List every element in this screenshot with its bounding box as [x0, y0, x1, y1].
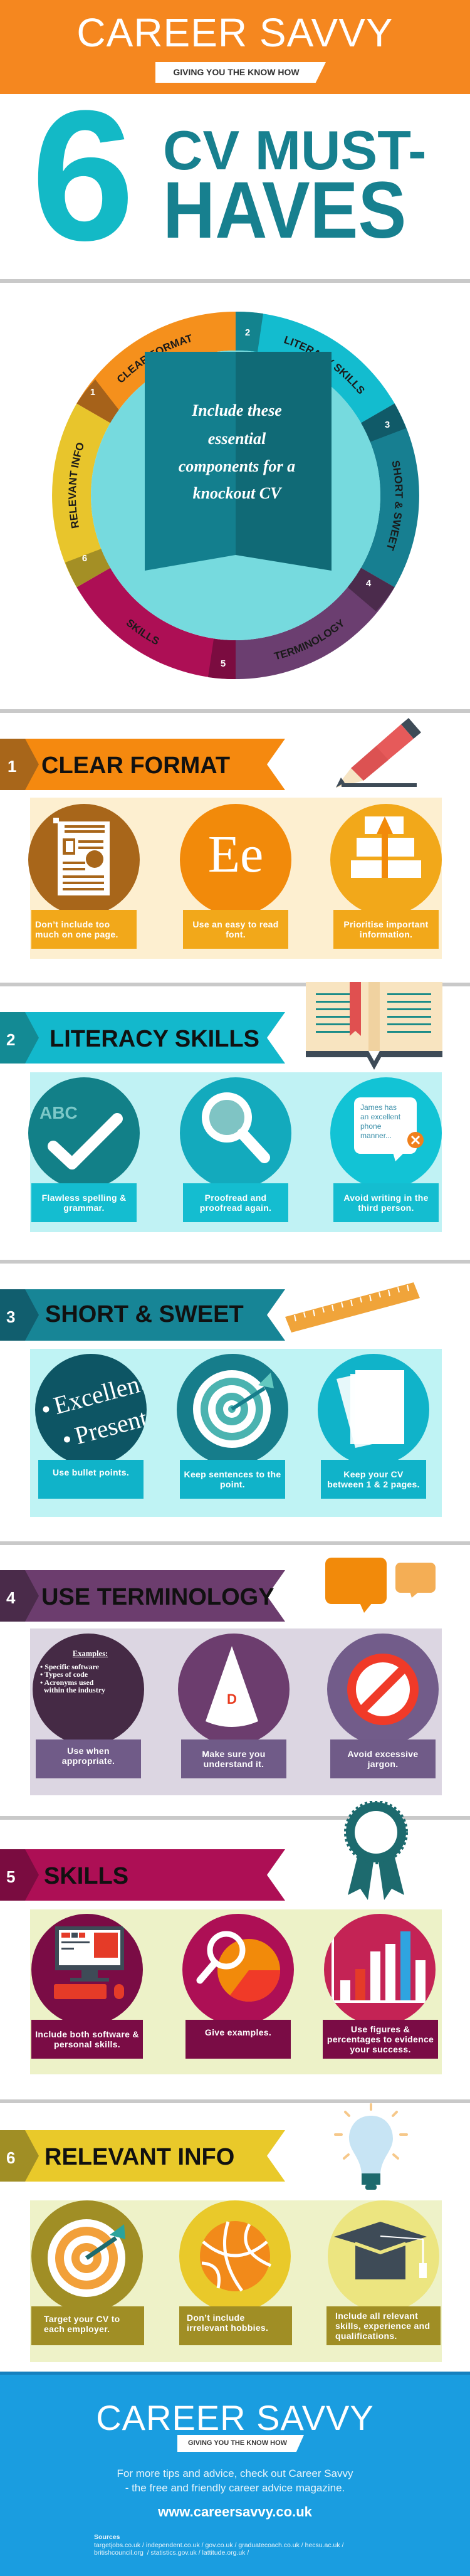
- icon: pencil: [336, 718, 421, 788]
- icon: document: [28, 804, 140, 916]
- ring labels: TERMINOLOGY: [273, 618, 343, 660]
- banner 6: relevant info: 6: [6, 2148, 15, 2167]
- banner 2: literacy skills: LITERACY SKILLS: [50, 1026, 259, 1052]
- item: bullet points: [35, 1354, 147, 1499]
- banner 5: skills: 5: [6, 1867, 15, 1886]
- item: avoid jargon: Avoid excessive jargon.: [348, 1749, 418, 1769]
- icon: examples list: • Acronyms used: [40, 1678, 93, 1687]
- item: hobbies: Don’t include irrelevant hobbies.: [187, 2313, 268, 2333]
- item: proofread: [180, 1077, 291, 1222]
- icon: examples list: [33, 1634, 144, 1745]
- panel 4: [30, 1628, 442, 1795]
- item: qualifications: Include all relevant skills, experience and qualifications.: [335, 2311, 430, 2341]
- item: proofread: Proofread and proofread again.: [200, 1193, 271, 1213]
- title: 6 CV must-haves: [31, 71, 426, 279]
- segment: terminology: [236, 568, 395, 679]
- wheel diagram: 6: [82, 553, 87, 564]
- icon: speech bubble: an excellent: [360, 1112, 401, 1121]
- item: use when appropriate: Use when appropriate.: [62, 1746, 115, 1766]
- wheel diagram: 1: [90, 387, 95, 398]
- item: spelling: [28, 1077, 140, 1222]
- center banner with text: [145, 352, 332, 571]
- icon: target: [31, 2200, 143, 2312]
- banner 2: literacy skills: [0, 1012, 285, 1064]
- wheel diagram: 2: [245, 327, 250, 338]
- segment: short & sweet: [361, 404, 419, 587]
- center banner with text: essential: [208, 430, 266, 448]
- item: understand it: Make sure you understand it.: [202, 1749, 266, 1769]
- header bar: [0, 0, 470, 94]
- title text: CV MUST-: [163, 119, 426, 181]
- item: give examples: [182, 1914, 294, 2059]
- item: figures: Use figures & percentages to evidence your success.: [327, 2024, 434, 2054]
- banner 5: skills: SKILLS: [44, 1863, 128, 1889]
- item: figures: [323, 1914, 438, 2059]
- icon: bullet text: [35, 1354, 147, 1465]
- item: qualifications: [326, 2200, 441, 2345]
- icon: papers: [318, 1354, 429, 1465]
- footer: [0, 2372, 470, 2576]
- item: prioritise: Prioritise important information.: [343, 919, 429, 939]
- icon: magnifier pie: [182, 1914, 294, 2025]
- icon: speech bubble: phone: [360, 1122, 382, 1131]
- ring labels: LITERACY SKILLS: [284, 336, 365, 394]
- item: give examples: Give examples.: [205, 2027, 271, 2037]
- banner 4: use terminology: 4: [6, 1588, 16, 1607]
- wheel diagram: 3: [385, 420, 390, 430]
- center banner with text: components for a: [179, 457, 295, 475]
- icon: ABC check: [28, 1077, 140, 1189]
- item: to the point: Keep sentences to the point.: [184, 1469, 281, 1489]
- icon: light bulb: [334, 2103, 408, 2190]
- icon: dunce cap: [178, 1634, 290, 1745]
- panel 1: [30, 798, 442, 959]
- ring labels: CLEAR FORMAT: [118, 334, 192, 383]
- wheel diagram: 4: [366, 578, 372, 589]
- title: 6 CV must-haves: HAVES: [163, 166, 406, 255]
- tagline: [155, 62, 326, 83]
- item: spelling: Flawless spelling & grammar.: [42, 1193, 126, 1213]
- item: too much on one page: [28, 804, 140, 949]
- item: software & personal skills: Include both software & personal skills.: [35, 2029, 139, 2049]
- ring labels: RELEVANT INFO: [68, 443, 84, 528]
- icon: computer: [31, 1914, 143, 2025]
- banner 2: literacy skills: 2: [6, 1030, 15, 1049]
- item: target CV: [31, 2200, 144, 2345]
- icon: graduation cap: [328, 2200, 439, 2312]
- footer text: For more tips and advice, check out Career Savvy: [117, 2468, 353, 2479]
- inner circle: [91, 351, 380, 640]
- wheel diagram: [52, 312, 419, 679]
- sources: targetjobs.co.uk / independent.co.uk / gov.co.uk / graduatecoach.co.uk / hecsu.ac.uk /: [94, 2541, 343, 2548]
- icon: examples list: Examples:: [73, 1649, 108, 1658]
- icon: Ee: [180, 804, 291, 916]
- icon: bar chart: [324, 1914, 436, 2025]
- item: avoid jargon: [327, 1634, 439, 1778]
- icon: speech bubbles: [325, 1558, 436, 1613]
- icon: award ribbon: [344, 1801, 408, 1900]
- item: easy font: Use an easy to read font.: [192, 919, 279, 939]
- sources: Sources: [94, 2533, 120, 2541]
- banner 3: short & sweet: SHORT & SWEET: [45, 1301, 244, 1328]
- item: software & personal skills: [31, 1914, 143, 2059]
- banner 4: use terminology: [0, 1570, 285, 1622]
- banner 1: clear format: 1: [8, 757, 16, 776]
- banner 6: relevant info: [0, 2130, 285, 2182]
- icon: dunce cap: D: [227, 1691, 237, 1707]
- footer text: [117, 2468, 353, 2494]
- icon: bullet text: Excellent: [51, 1368, 147, 1420]
- banner 6: relevant info: RELEVANT INFO: [44, 2144, 234, 2170]
- wheel diagram: 5: [221, 658, 226, 669]
- banner 5: skills: [0, 1849, 285, 1901]
- panel 5: [30, 1909, 442, 2074]
- banner 1: clear format: [0, 739, 285, 790]
- segment: skills: [76, 568, 236, 679]
- icon: examples list: • Specific software: [40, 1662, 99, 1671]
- footer tagline: GIVING YOU THE KNOW HOW: [188, 2439, 287, 2447]
- big number 6: 6: [31, 71, 135, 279]
- banner 3: short & sweet: 3: [6, 1307, 15, 1326]
- icon: target: [177, 1354, 288, 1465]
- label: Don’t include too much on one page.: [35, 919, 118, 939]
- center banner with text: Include these: [191, 401, 282, 420]
- sources: [94, 2533, 343, 2557]
- icon: speech bubble: [330, 1077, 442, 1189]
- logo: Career Savvy: CAREER SAVVY: [76, 10, 394, 55]
- ring labels: [68, 334, 403, 660]
- icon: blocks with arrow: [330, 804, 442, 916]
- panel 3: [30, 1349, 442, 1517]
- segment: literacy skills: [236, 312, 395, 423]
- icon: open book: [306, 982, 442, 1070]
- center banner with text: knockout CV: [193, 484, 283, 502]
- icon: examples list: within the industry: [44, 1686, 105, 1694]
- panel 2: [30, 1072, 442, 1232]
- item: target CV: Target your CV to each employer.: [44, 2314, 120, 2334]
- footer tagline: [177, 2435, 304, 2452]
- ring labels: SHORT & SWEET: [387, 460, 403, 551]
- sources: britishcouncil.org / statistics.gov.uk / lattitude.org.uk /: [94, 2549, 249, 2557]
- item: to the point: [177, 1354, 288, 1499]
- item: 1 to 2 pages: Keep your CV between 1 & 2 pages.: [327, 1469, 420, 1489]
- item: third person: [330, 1077, 442, 1222]
- item: understand it: [178, 1634, 290, 1778]
- icon: ruler: [285, 1282, 420, 1333]
- icon: examples list: • Types of code: [40, 1670, 88, 1679]
- icon: basketball: [179, 2200, 291, 2312]
- footer text: - the free and friendly career advice magazine.: [125, 2482, 345, 2494]
- segment: clear format: [76, 312, 236, 423]
- website url: www.careersavvy.co.uk: [158, 2504, 312, 2520]
- icon: Ee: Ee: [208, 825, 263, 884]
- tagline: GIVING YOU THE KNOW HOW: [173, 67, 300, 77]
- banner 3: short & sweet: [0, 1289, 285, 1341]
- panel 6: [30, 2200, 442, 2362]
- item: bullet points: Use bullet points.: [53, 1467, 129, 1477]
- number tabs: [76, 379, 119, 423]
- ring labels: SKILLS: [127, 620, 159, 645]
- banner 4: use terminology: USE TERMINOLOGY: [41, 1584, 274, 1610]
- item: easy font: [180, 804, 291, 949]
- icon: speech bubble: James has: [360, 1103, 397, 1112]
- segment: relevant info: [52, 404, 110, 587]
- banner 1: clear format: CLEAR FORMAT: [41, 752, 230, 779]
- item: prioritise: [330, 804, 442, 949]
- item: third person: Avoid writing in the third person.: [343, 1193, 429, 1213]
- icon: ABC check: ABC: [39, 1103, 78, 1122]
- footer logo: CAREER SAVVY: [96, 2398, 374, 2437]
- label: [31, 910, 137, 949]
- icon: speech bubble: manner...: [360, 1131, 392, 1140]
- icon: prohibited sign: [327, 1634, 439, 1745]
- item: 1 to 2 pages: [318, 1354, 429, 1499]
- item: use when appropriate: [33, 1634, 144, 1778]
- item: hobbies: [179, 2200, 292, 2345]
- icon: magnifier: [180, 1077, 291, 1189]
